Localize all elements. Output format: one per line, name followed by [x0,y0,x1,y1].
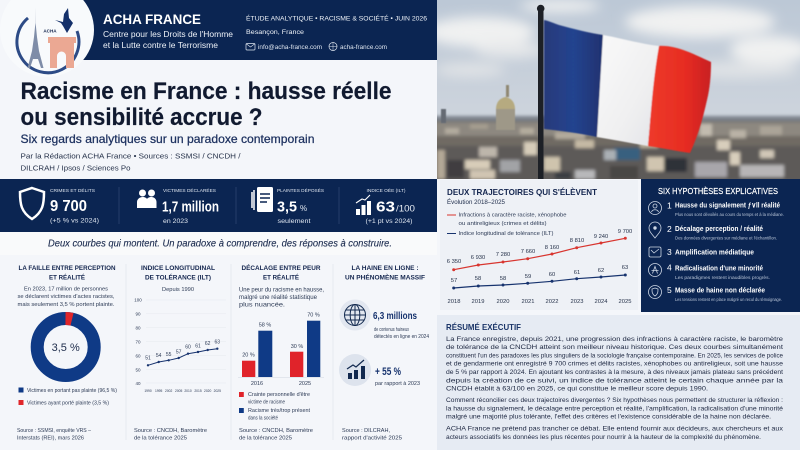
hypothesis 5: Masse de haine non déclarée [675,286,765,294]
stat: victimes: 1,7 million [162,200,219,216]
photo: French flag over Paris [425,0,800,183]
hypothesis 5: 5 [667,285,672,295]
subheading: Évolution 2018–2025 [447,197,505,206]
study meta: Besançon, France [246,29,304,36]
contact row: info@acha-france.com [258,45,322,51]
line chart: 2020 [204,389,212,393]
stat: victimes: VICTIMES DÉCLARÉES [163,187,216,194]
hypothesis 2 [649,222,777,240]
source: de la tolérance 2025 [134,436,187,442]
stat: plaintes: % [300,204,307,213]
line chart: 62 [205,341,211,347]
organisation name: ACHA FRANCE [103,12,201,27]
source [134,428,207,442]
paragraph 3: acteurs associatifs les données les plus récentes pour nourrir à la hauteur de la complexité du phénomène. [446,434,761,441]
hypothesis 4: Radicalisation d'une minorité [675,264,763,272]
legend: Racisme très/trop présent [248,408,310,414]
paragraph 1: de 5 % par rapport à 2024. En ajoutant les contrastes à la mesure, à des niveaux jamais plateau sans précédent [446,369,783,376]
line chart: 2005 [175,389,183,393]
line chart: 2019 [472,299,484,305]
subheading: Depuis 1990 [162,287,194,293]
line chart: 2025 [214,389,221,393]
bar chart: 20 % [242,352,255,358]
heading: INDICE LONGITUDINAL [141,265,215,272]
stat: victimes: en 2023 [163,218,188,225]
bar chart: 2016 [251,381,263,387]
legend [447,212,566,237]
title [20,78,392,131]
stat: indice: INDICE OÉE (ILT) [366,187,406,194]
legend: Victimes ayant porté plainte (3,5 %) [27,400,109,406]
line chart: 58 [500,276,506,282]
line chart: 1995 [155,389,163,393]
study meta: ÉTUDE ANALYTIQUE • RACISME & SOCIÉTÉ • JUIN 2026 [246,14,428,22]
paragraph 1: depuis la création de ce suivi, un indice de tolérance atteint le certain chaque année par la [446,377,783,384]
stat: +55 %: + 55 % [375,366,401,378]
line chart: 8 810 [570,238,584,244]
line chart: 59 [525,274,531,280]
icon: document [252,187,273,212]
line chart: 2015 [194,389,202,393]
hypothesis 3 [649,247,754,257]
heading [18,265,116,281]
stat: crimes: 9 700 [50,198,87,215]
legend: ou antireligieux (crimes et délits) [458,221,547,227]
legend [18,388,117,406]
hypothesis 4 [648,262,770,280]
tagline: Deux courbes qui montent. Un paradoxe à comprendre, des réponses à construire. [48,238,392,250]
flag pole [537,5,544,179]
panel: la faille [17,265,117,442]
source: rapport d'activité 2025 [342,436,402,442]
line chart: 7 660 [521,249,535,255]
line chart: 2025 [619,299,631,305]
subtitle: Six regards analytiques sur un paradoxe contemporain [20,132,314,146]
description: plus nuancée. [239,302,285,308]
stats band [0,179,437,232]
line chart: 2020 [497,299,509,305]
stat: 6,3 millions: 6,3 millions [373,310,417,322]
legend: Crainte personnelle d'être [248,392,310,398]
study meta [246,14,428,36]
logo [0,0,94,77]
hypothesis 2: 2 [667,224,672,234]
skyline [430,116,800,183]
hypothesis 3: Amplification médiatique [675,248,754,256]
paragraph 2: malgré une majorité plus tolérante, l'effet des critères et l'existence considérable de la haine non déclarée. [446,414,771,420]
dome [441,85,515,130]
paragraph 1: et de gendarmerie ont enregistré 9 700 crimes et délits racistes, xénophobes ou antireligieux, soit une hausse [446,360,783,368]
heading: LA HAINE EN LIGNE : [352,265,418,272]
paragraph 1: de tolérance de la CNCDH atteint son meilleur niveau historique. Ces deux courbes simultanément [446,344,783,351]
source: de la tolérance 2025 [239,436,292,442]
line chart: 61 [574,270,580,276]
legend: victime de racisme [248,400,285,406]
title: ou sensibilité accrue ? [20,104,262,131]
line chart: 63 [215,340,220,346]
stat: plaintes: 3,5 [277,200,297,216]
panel: décalage [238,263,324,442]
paragraph 2: la hausse du signalement, le décalage entre perception et réalité, l'amplification, la radicalisation d'une minorité [446,405,783,412]
source: Interstats (REI), mars 2026 [17,436,84,442]
description: malgré une réalité statistique [239,295,318,301]
contact row [246,42,387,51]
line chart: 62 [598,268,604,274]
panel: indice longitudinal [134,265,226,442]
paragraph 2: Comment réconcilier ces deux trajectoires divergentes ? Six hypothèses nous permettent de structurer la réflexion : [446,397,783,404]
description [18,286,115,308]
heading: SIX HYPOTHÈSES EXPLICATIVES [658,186,778,196]
organisation description: et la Lutte contre le Terrorisme [103,41,219,50]
heading: DEUX TRAJECTOIRES QUI S'ÉLÈVENT [447,187,598,197]
bar chart: 58 % [259,322,271,328]
paragraph 1: constituent l'un des paradoxes les plus singuliers de la sociologie française contemporaine. En 2025, les services de police [446,352,783,359]
line chart: 2021 [522,299,534,305]
stat: +55 %: par rapport à 2023 [375,381,420,387]
panel: résumé exécutif [437,315,800,450]
line chart: 51 [145,356,151,362]
contact row: acha-france.com [340,45,387,51]
description: mais seulement 3,5 % portent plainte. [18,302,115,308]
heading: RÉSUMÉ EXÉCUTIF [446,322,521,332]
stat: indice: (+1 pt vs 2024) [366,218,412,225]
line chart: 57 [451,278,457,284]
line chart [447,229,632,305]
description [239,288,324,308]
line chart: 100 [134,298,142,302]
byline: DILCRAH / Ipsos / Sciences Po [20,166,131,172]
hypothesis 5 [648,285,782,302]
line chart: 58 [475,276,481,282]
line chart: 6 350 [447,259,461,265]
heading: DE TOLÉRANCE (ILT) [145,272,211,281]
hypothesis 4: Les paradigmes restent inaudibles progrès. [675,275,770,280]
paragraph 1 [446,336,783,392]
heading: ET RÉALITÉ [49,272,85,281]
description: En 2023, 17 million de personnes [24,286,108,292]
arch [48,37,76,68]
source [342,428,402,442]
tagline [0,232,437,255]
line chart: 90 [135,312,141,316]
line chart [134,298,226,393]
heading: ET RÉALITÉ [263,272,299,281]
paragraph 1: La France enregistre, depuis 2021, une progression des infractions à caractère raciste, le baromètre [446,336,783,343]
bar chart: 30 % [291,344,303,350]
stat: indice: 63 [376,200,395,216]
legend: dans la société [248,416,278,422]
stat: crimes: (+5 % vs 2024) [50,218,99,224]
heading: UN PHÉNOMÈNE MASSIF [345,272,425,281]
paragraph 1: CNCDH établit à 63/100 en 2025, ce qui constitue le meilleur score depuis 1990. [446,386,708,392]
source [239,428,313,442]
stat: indice [356,187,415,225]
line chart: 8 160 [545,245,559,251]
organisation description [103,30,234,50]
stat: plaintes: seulement [278,218,311,225]
hypothesis 1: Hausse du signalement ƒ∨ll réalité [675,200,780,210]
dove [55,8,73,33]
legend: Indice longitudinal de tolérance (ILT) [458,231,554,237]
stat: plaintes: PLAINTES DÉPOSÉS [277,187,324,194]
header band [70,0,437,60]
icon: chart [339,354,371,386]
stat: crimes [20,187,99,224]
paragraph 3 [446,426,784,441]
stat: +55 % [375,366,420,387]
paragraph 3: ACHA France ne prétend pas trancher ce débat. Elle entend fournir aux décideurs, aux chercheurs et aux [446,426,784,432]
line chart: 2024 [595,299,608,305]
hypothesis 5: Les tensions restent en place malgré un recul du témoignage. [675,297,782,302]
hypothesis 1 [648,200,784,217]
line chart: 2002 [165,389,173,393]
title: Racisme en France : hausse réelle [20,78,392,105]
panel: six hypothèses [641,179,800,312]
stat: indice: /100 [396,204,415,214]
panel: haine en ligne [339,265,429,442]
heading [141,265,215,281]
heading: DÉCALAGE ENTRE PEUR [242,263,321,272]
source: Source : DILCRAH, [342,428,390,434]
donut chart: 3,5 % [52,342,80,354]
line chart: 9 240 [594,234,608,240]
paragraph 2 [446,397,783,420]
bar chart [238,312,324,387]
bar chart: 2025 [299,381,311,387]
legend: Infractions à caractère raciste, xénophobe [458,212,566,218]
line chart: 2023 [571,299,583,305]
byline [20,154,241,172]
icon: rising bars [356,195,371,215]
line chart: 57 [176,350,182,356]
stat: 6,3 millions: de contenus haineux [374,327,409,333]
line chart: 55 [166,352,172,358]
heading [242,263,321,281]
source: Source : SSMSI, enquête VRS – [17,428,92,434]
heading [345,265,425,281]
line chart: 63 [622,265,628,271]
line chart: 60 [549,272,555,278]
hypothesis 2: Des données divergentes sur médiane et l'échantillon. [675,236,777,240]
logo text: ACHA [43,28,57,34]
hypothesis 1: 1 [667,200,672,210]
hypothesis 3: 3 [667,247,672,257]
line chart: 40 [135,381,141,386]
panel: deux trajectoires [440,180,638,310]
icon: globe [340,300,370,330]
byline: Par la Rédaction ACHA France • Sources : SSMSI / CNCDH / [20,154,241,160]
source [17,428,92,442]
line chart: 2022 [546,299,558,305]
bar chart: 70 % [307,312,320,318]
icon: people [137,190,156,208]
line chart: 60 [185,344,191,350]
stat: victimes [137,187,219,225]
hypothesis 2: Décalage perception / réalité [675,224,763,233]
line chart: 50 [135,368,141,372]
legend [239,392,310,422]
legend: Victimes en portant pas plainte (96,5 %) [27,388,117,394]
line chart: 9 700 [618,229,632,235]
stat: 6,3 millions: détectés en ligne en 2024 [374,334,429,340]
stat: 6,3 millions [373,310,429,340]
description: Une peur du racisme en hausse, [239,288,324,294]
description: se déclarent victimes d'actes racistes, [18,294,115,300]
icon: shield [20,188,44,219]
line chart: 61 [195,344,201,350]
stat: crimes: CRIMES ET DÉLITS [50,187,95,194]
source: Source : CNCDH, Baromètre [239,428,313,434]
line chart: 54 [156,353,162,359]
hypothesis 4: 4 [667,262,672,272]
flag [544,20,711,153]
line chart: 70 [135,340,141,344]
line chart: 7 280 [496,252,510,258]
line chart: 6 930 [471,255,485,261]
tower [28,7,44,68]
heading: LA FAILLE ENTRE PERCEPTION [18,265,116,272]
line chart: 2018 [448,299,460,305]
stat: plaintes [252,187,324,225]
line chart: 2010 [184,389,192,393]
donut chart [37,318,94,376]
line chart: 1990 [144,389,152,393]
line chart: 60 [135,354,141,358]
hypothesis 1: Plus nous sont dévoilés au cours du temps et à la médiane. [675,212,784,217]
organisation description: Centre pour les Droits de l'Homme [103,30,234,39]
source: Source : CNCDH, Baromètre [134,428,207,434]
line chart: 80 [135,326,141,330]
